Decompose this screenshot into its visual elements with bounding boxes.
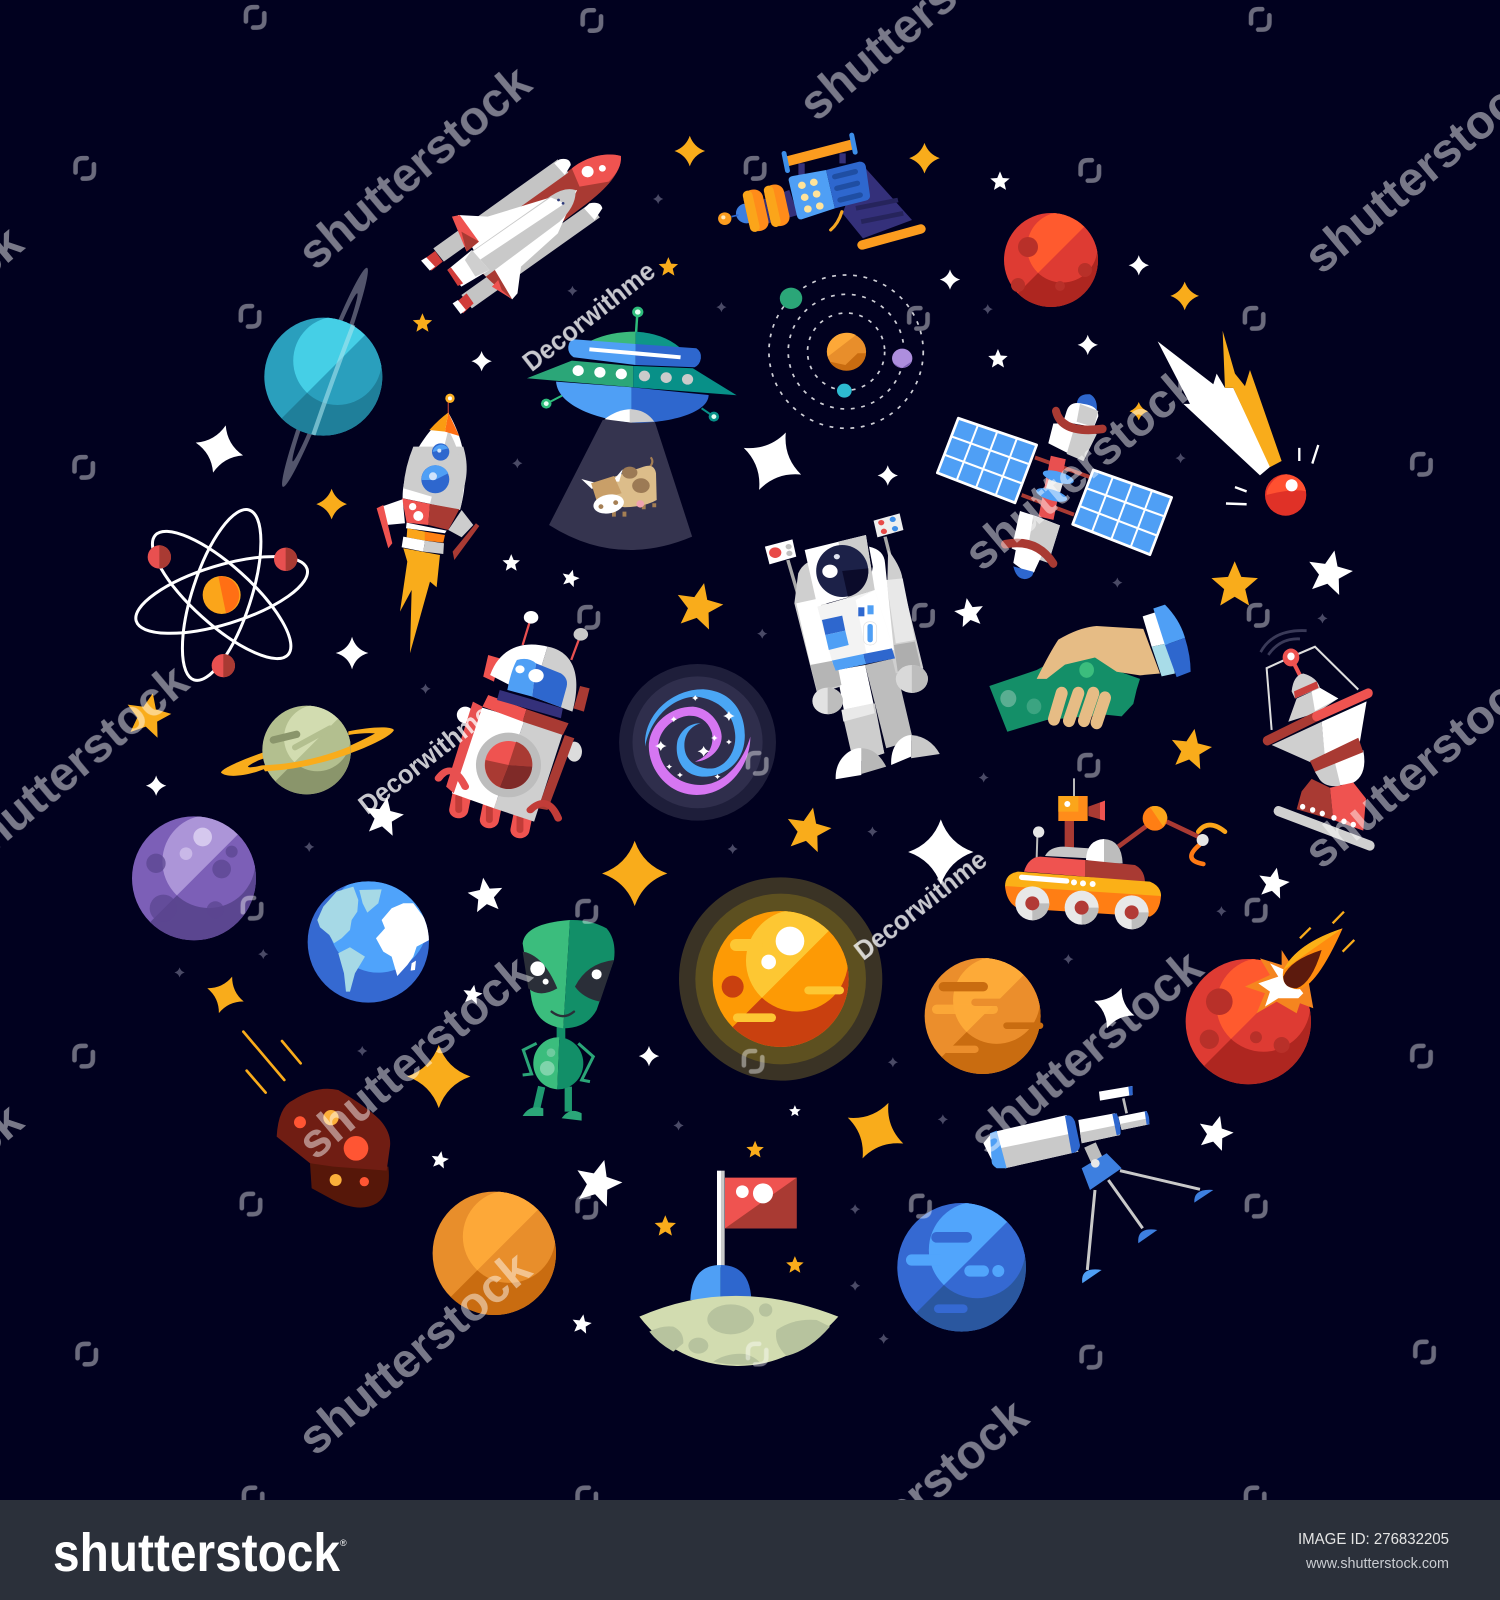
solar panel right xyxy=(1073,470,1172,555)
icon: space station with solar panels xyxy=(937,394,1172,579)
icon: space shuttle xyxy=(421,154,621,314)
Decorwithme watermarks: Decorwithme xyxy=(517,256,661,377)
solar panel left xyxy=(937,418,1037,503)
icon: red planet hit by meteor xyxy=(1123,896,1374,1147)
white stars xyxy=(146,171,1356,1334)
icon: alien xyxy=(523,920,615,1121)
planet: earth xyxy=(308,874,429,1003)
planet: orange striped xyxy=(867,900,1099,1132)
planet: blue ringed xyxy=(205,259,441,495)
icon: atom xyxy=(128,501,316,689)
small grey sparkles xyxy=(174,194,1328,1344)
icon: asteroid xyxy=(243,1032,390,1208)
planet: sun with rings xyxy=(645,843,917,1115)
icon: flag on the moon xyxy=(639,1171,838,1366)
website: www.shutterstock.com xyxy=(1305,1555,1449,1572)
icon: satellite dish xyxy=(1261,631,1370,846)
icon: space telescope gun xyxy=(718,135,921,245)
cow xyxy=(581,457,657,517)
planet: blue striped xyxy=(833,1139,1090,1396)
planet: orange bottom xyxy=(371,1130,618,1377)
icon: lunar rover xyxy=(1005,778,1225,929)
planet: purple moon xyxy=(70,754,318,1002)
icon: robot xyxy=(438,611,590,830)
orange stars xyxy=(122,136,1258,1273)
planet: red top right xyxy=(957,166,1145,354)
saucer xyxy=(527,307,737,423)
icon: handshake xyxy=(989,605,1191,732)
icon: comet xyxy=(1158,331,1318,516)
footer bar xyxy=(0,1500,1500,1600)
Decorwithme watermarks: Decorwithme xyxy=(848,844,992,966)
registered mark: ® xyxy=(340,1538,347,1548)
icon: astronaut xyxy=(765,513,940,779)
image id: IMAGE ID: 276832205 xyxy=(1298,1531,1449,1548)
shutterstock watermarks: shutterstock xyxy=(288,55,541,280)
shutterstock watermarks: shutterstock xyxy=(955,356,1208,581)
planet: olive with orange ring xyxy=(218,661,395,839)
icon: rocket xyxy=(377,394,479,653)
tractor beam xyxy=(549,420,692,550)
shutterstock watermarks: shutterstock xyxy=(288,1241,541,1466)
footer logo: shutterstock xyxy=(53,1523,341,1583)
icon: telescope on tripod xyxy=(983,1086,1213,1283)
shutterstock watermarks: shutterstock xyxy=(288,945,541,1170)
Decorwithme watermarks xyxy=(353,256,992,966)
shutterstock watermarks: shutterstock xyxy=(960,940,1213,1165)
icon: solar system orbits xyxy=(769,275,923,428)
icon: spiral galaxy xyxy=(619,664,776,821)
icon: UFO abducting cow xyxy=(527,307,737,550)
Decorwithme watermarks: Decorwithme xyxy=(353,698,496,820)
